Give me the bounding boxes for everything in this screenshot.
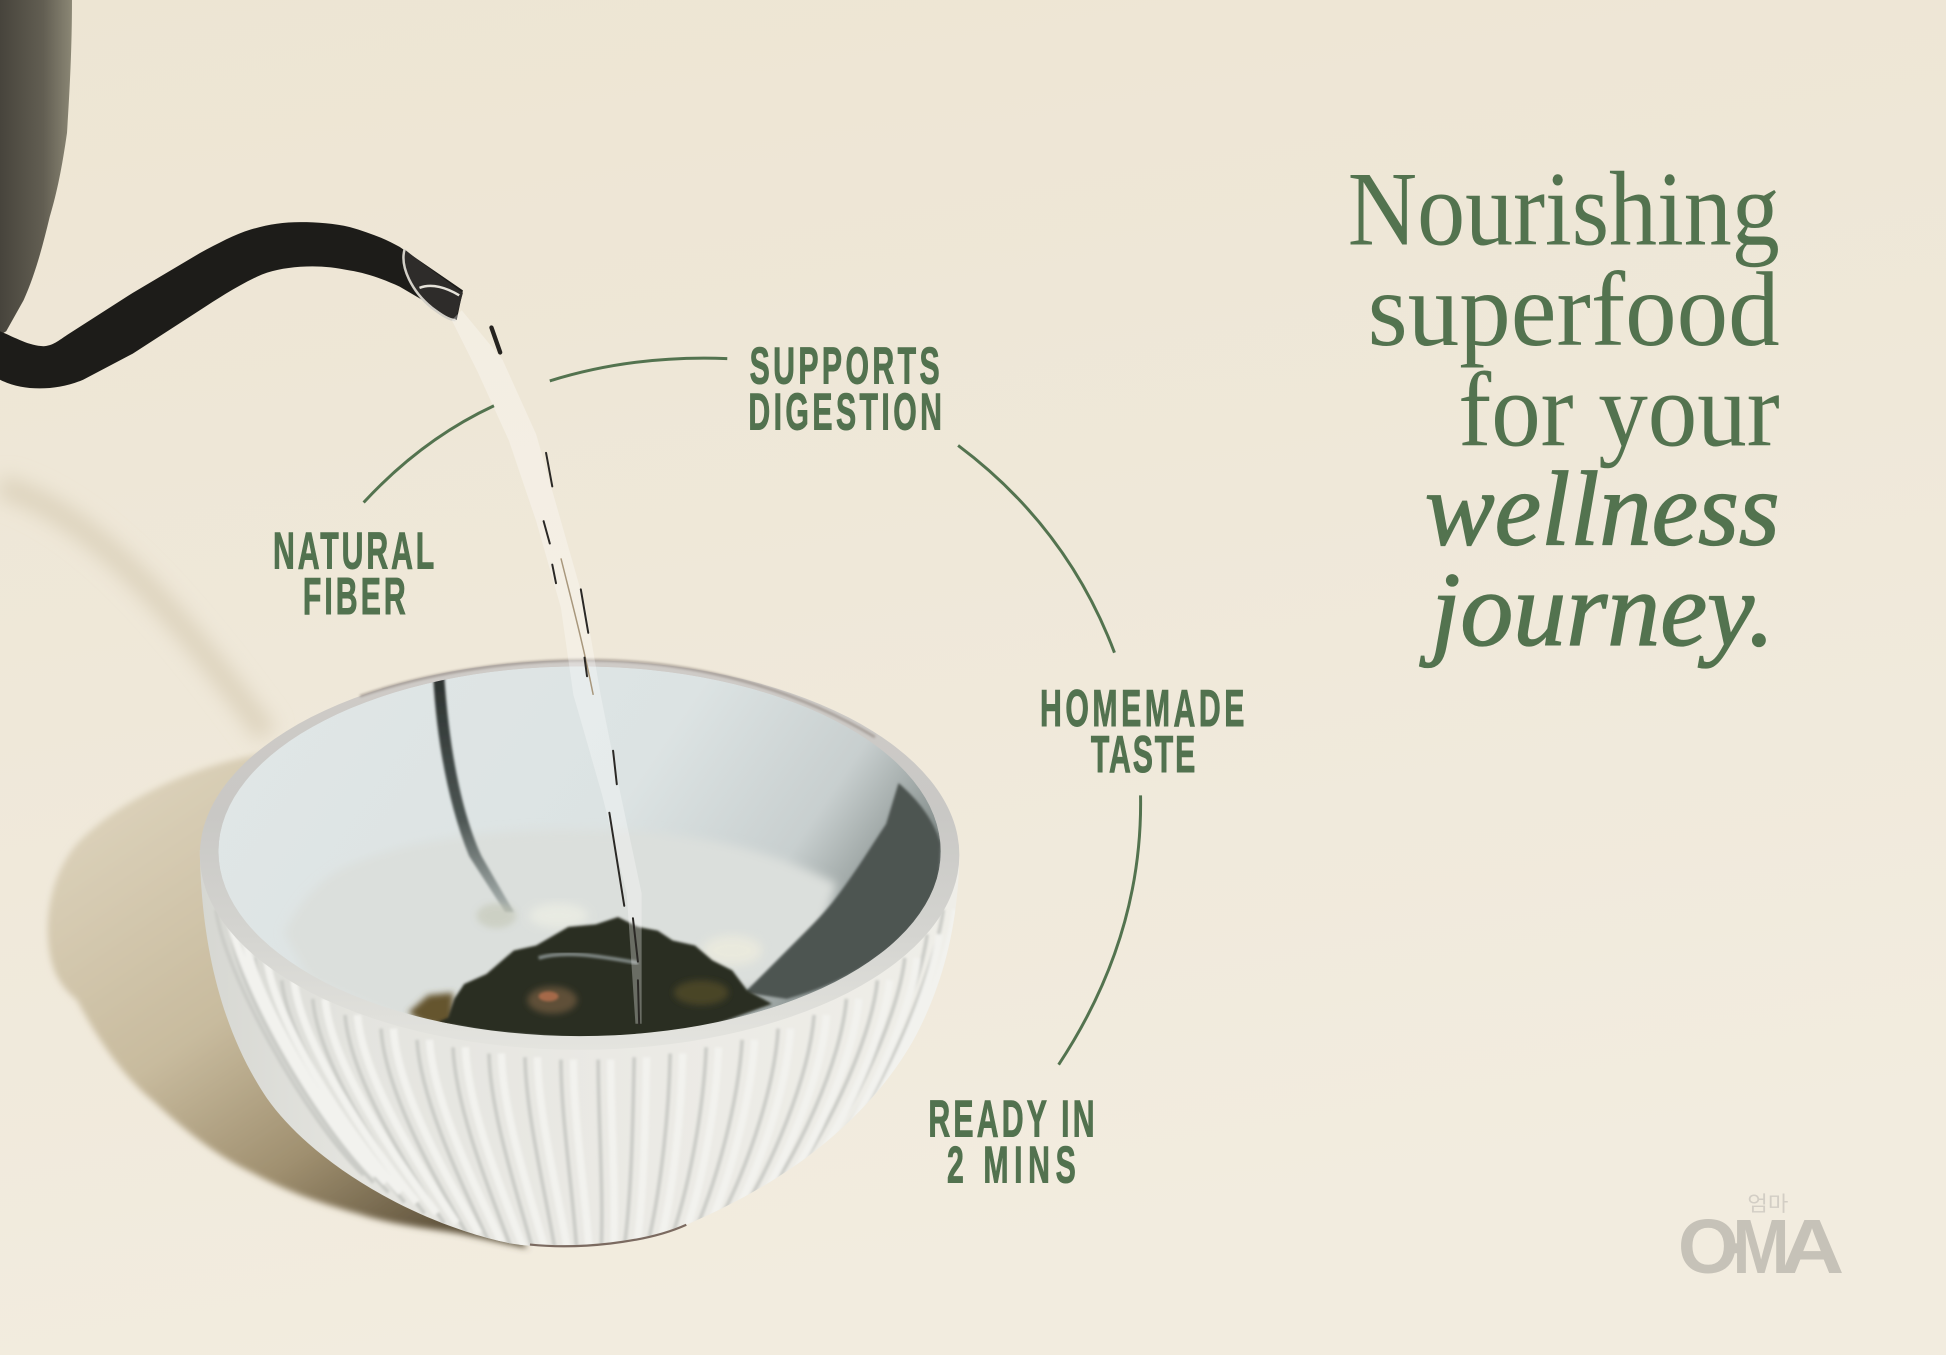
label: supports digestion: SUPPORTS bbox=[750, 337, 940, 396]
label: supports digestion bbox=[748, 337, 942, 442]
dark shadow crescent bbox=[745, 783, 941, 999]
connector arc: ready in 2 mins bbox=[1059, 795, 1141, 1065]
connector arc: natural fiber bbox=[364, 406, 494, 503]
connector arc: homemade taste bbox=[958, 445, 1114, 653]
kettle body bbox=[0, 0, 72, 335]
soaking food lump bbox=[437, 917, 772, 1040]
label: homemade taste: TASTE bbox=[1091, 725, 1195, 784]
label: ready in 2 mins: 2 MINS bbox=[947, 1136, 1076, 1195]
headline: wellness bbox=[1425, 451, 1780, 568]
bowl interior bbox=[218, 666, 941, 1040]
bowl ribs bbox=[216, 910, 956, 1258]
bowl rim bbox=[200, 660, 959, 1050]
water stream bbox=[452, 310, 642, 1024]
label: homemade taste bbox=[1040, 679, 1244, 784]
kettle spout bbox=[0, 222, 463, 388]
label: supports digestion: DIGESTION bbox=[748, 383, 942, 442]
label: natural fiber: NATURAL bbox=[273, 522, 434, 581]
photo: kettle pouring water into bowl bbox=[0, 0, 959, 1258]
bowl foot bbox=[530, 1225, 686, 1246]
herb bits bbox=[408, 993, 453, 1030]
label: natural fiber: FIBER bbox=[303, 568, 406, 626]
logo: OMA: 엄마 bbox=[1747, 1192, 1788, 1216]
label: natural fiber bbox=[273, 522, 434, 626]
logo: OMA: O bbox=[1678, 1204, 1739, 1290]
bowl body bbox=[200, 850, 959, 1247]
headline: Nourishing bbox=[1348, 150, 1780, 267]
logo: OMA bbox=[1678, 1192, 1844, 1290]
spout opening bbox=[403, 249, 463, 320]
water surface bbox=[292, 840, 840, 1008]
headline: for your bbox=[1458, 351, 1780, 468]
kettle handle shadow on table bbox=[0, 486, 267, 735]
label: ready in 2 mins bbox=[928, 1090, 1095, 1195]
bowl shadow on table bbox=[48, 752, 527, 1248]
connector arc: supports digestion bbox=[550, 358, 727, 381]
headline: superfood bbox=[1368, 251, 1780, 368]
kettle reflection bbox=[433, 676, 514, 912]
residue on water bbox=[477, 903, 516, 928]
rim top edge bbox=[360, 660, 875, 737]
logo: OMA: M bbox=[1733, 1204, 1790, 1290]
food highlights bbox=[539, 954, 638, 963]
label: homemade taste: HOMEMADE bbox=[1040, 679, 1244, 738]
label: ready in 2 mins: READY IN bbox=[928, 1090, 1095, 1149]
headline: journey. bbox=[1419, 551, 1775, 668]
logo: OMA: A bbox=[1780, 1204, 1844, 1290]
headline bbox=[1348, 150, 1780, 668]
